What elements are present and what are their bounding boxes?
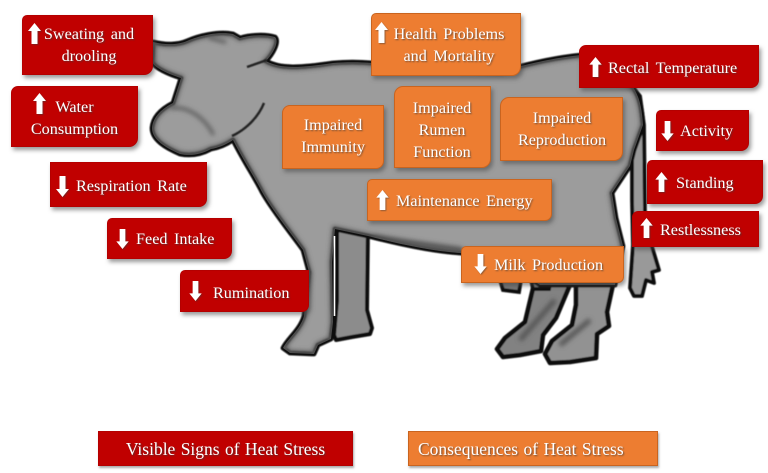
label: sweating and drooling xyxy=(22,15,153,75)
text: sweating and drooling: Sweating and xyxy=(44,25,134,43)
text: impaired immunity: Impaired xyxy=(304,116,362,134)
text: impaired reproduction: Impaired xyxy=(533,109,591,127)
text: impaired rumen function xyxy=(413,99,472,161)
icon: down arrow xyxy=(116,229,130,250)
text: feed intake: Feed Intake xyxy=(136,230,214,248)
text: rectal temperature: Rectal Temperature xyxy=(608,59,737,77)
text: sweating and drooling xyxy=(44,25,136,66)
icon: up arrow xyxy=(375,22,390,45)
label: rumination xyxy=(180,270,309,312)
text: activity: Activity xyxy=(680,122,733,140)
text: impaired immunity: Immunity xyxy=(301,138,365,156)
icon: up arrow xyxy=(655,172,669,194)
text: water consumption xyxy=(31,98,120,140)
cow body xyxy=(152,33,643,354)
icon: up arrow xyxy=(33,93,47,116)
hind leg shading xyxy=(520,300,590,345)
label: maintenance energy xyxy=(367,179,552,221)
far front leg xyxy=(334,225,372,340)
text: impaired reproduction xyxy=(518,109,608,150)
text: health problems and mortality xyxy=(394,25,506,66)
text: impaired rumen function: Rumen xyxy=(419,121,465,139)
icon: up arrow xyxy=(589,57,603,78)
icon: down arrow xyxy=(56,176,70,198)
text: respiration rate: Respiration Rate xyxy=(76,177,187,195)
text: health problems and mortality: Health Problems xyxy=(394,25,504,43)
label: activity xyxy=(656,110,749,151)
tail xyxy=(630,86,659,296)
text: rumination: Rumination xyxy=(213,284,289,302)
label: health problems and mortality xyxy=(371,13,521,76)
label: respiration rate xyxy=(50,162,207,207)
label: impaired reproduction xyxy=(500,97,623,161)
legend text: visible signs: Visible Signs of Heat Stress xyxy=(126,439,325,459)
label: restlessness xyxy=(632,211,759,247)
legend: visible signs of heat stress xyxy=(98,431,353,466)
text: impaired rumen function: Function xyxy=(413,143,471,161)
neck crease xyxy=(232,60,267,136)
text: milk production: Milk Production xyxy=(494,256,603,274)
label: standing xyxy=(647,160,763,204)
text: impaired immunity xyxy=(301,116,366,158)
near hind leg xyxy=(545,280,614,363)
gap between front legs xyxy=(334,236,336,316)
text: standing: Standing xyxy=(676,174,734,192)
text: impaired rumen function: Impaired xyxy=(413,99,471,117)
label: milk production xyxy=(461,246,624,283)
text: health problems and mortality: and Mortality xyxy=(403,47,495,65)
face and body shading xyxy=(152,33,643,354)
label: water consumption xyxy=(11,86,138,147)
text: restlessness: Restlessness xyxy=(660,221,741,239)
icon: up arrow xyxy=(28,23,42,46)
icon: up arrow xyxy=(376,190,390,212)
text: sweating and drooling: drooling xyxy=(62,47,116,65)
icon: up arrow xyxy=(640,218,654,240)
udder xyxy=(500,280,551,292)
label: impaired rumen function xyxy=(394,86,491,168)
cow illustration xyxy=(148,30,662,366)
text: impaired reproduction: Reproduction xyxy=(518,131,606,149)
label: rectal temperature xyxy=(579,45,759,88)
legend text: consequences: Consequences of Heat Stress xyxy=(418,439,624,459)
icon: down arrow xyxy=(189,281,203,302)
far hind leg xyxy=(497,280,572,357)
text: water consumption: Water xyxy=(55,98,94,116)
icon: down arrow xyxy=(474,254,488,276)
legend: consequences of heat stress xyxy=(408,431,658,466)
text: maintenance energy: Maintenance Energy xyxy=(396,192,533,210)
text: water consumption: Consumption xyxy=(31,120,118,138)
icon: down arrow xyxy=(661,121,675,142)
label: impaired immunity xyxy=(282,105,384,169)
label: feed intake xyxy=(107,218,232,259)
